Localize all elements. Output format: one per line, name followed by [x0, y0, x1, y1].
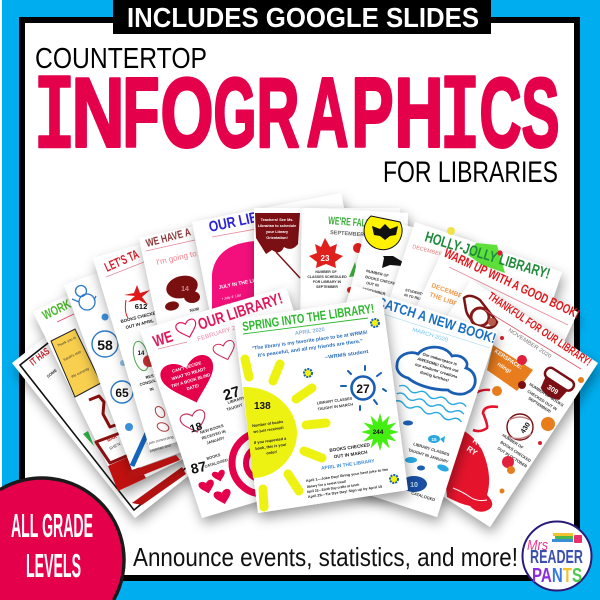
card: let's talk: CONSUL [139, 378, 157, 387]
orange callout: KERSPACE: [493, 349, 523, 371]
card: let's talk: LET'S TA [102, 246, 141, 275]
logo: Mrs Reader Pants: PANTS [532, 565, 582, 587]
card: teachers: Teachers! See Ms. [261, 218, 293, 222]
card: we love our library [140, 287, 346, 518]
card: bat: OUT IN [366, 281, 379, 288]
April event list: library for a sweet treat! [307, 480, 346, 489]
stat: 87 [189, 452, 228, 477]
card: our library July: • July 4: Libr [221, 293, 242, 301]
cloud callout [397, 347, 475, 394]
card: thankful for our library: NOVEMBER 2020 [507, 328, 552, 360]
heading: infographics: C [480, 58, 522, 168]
card: spring into the library [234, 297, 408, 513]
card: catch a new book [292, 285, 498, 517]
badge: all grade levels: LEVELS [26, 547, 81, 584]
card: work: MAR [106, 434, 118, 443]
card: spring into the library: TAUGHT IN MARCH [318, 402, 354, 411]
card: we love our library: WE [151, 328, 175, 351]
card: thankful for our library: RY [465, 444, 479, 458]
waves [394, 384, 467, 424]
card: we have a: WE HAVE A [145, 226, 192, 250]
cloud callout: AWESOME! Check out [417, 356, 460, 373]
card: work: SHE'N [108, 441, 121, 451]
stat: 87: BOOKS [206, 452, 221, 461]
card: let's talk: pajamas and [149, 443, 171, 453]
card: we're falling: SEPTEMBER 2 [330, 230, 369, 239]
card: holly-jolly library: DECEMBER [411, 244, 443, 258]
icon: outline heart [175, 318, 199, 340]
card: teachers: your Library [266, 230, 289, 234]
big heart callout: TRY A BOOK BLIND [171, 372, 211, 389]
big heart callout: WHAT TO READ? [171, 366, 207, 381]
icon: books and mug [552, 533, 582, 543]
icon: apple stat 14: 14 [138, 351, 145, 357]
stat: 27 sun: 27 [356, 382, 370, 396]
flower icons [304, 319, 398, 483]
heading: infographics: I [451, 58, 468, 168]
April event list: April 22—Earth Day crafts at lunch [307, 483, 360, 494]
stat: 18: 18 [189, 421, 204, 436]
card: we're falling: FOR LIBRARY IN [313, 280, 342, 284]
heading: infographics: G [214, 58, 256, 168]
card: catch a new book: TAUGHT IN JANUARY [408, 447, 449, 464]
yellow note box: Sarah's club [63, 350, 82, 362]
card: work [33, 245, 257, 491]
big heart callout: CAN'T DECIDE [171, 360, 202, 374]
card: spring into the library: LIBRARY CLASSES [317, 397, 353, 405]
card: we're falling: CLASSES SCHEDULED [307, 275, 347, 279]
card: bat: SEPTEMBER [362, 287, 386, 296]
card: thankful for our library: SEPTEMBER! [527, 396, 552, 414]
fish [403, 420, 450, 473]
card: our library July: OUR LIB [207, 209, 260, 236]
burst: 244: 244 [373, 429, 384, 436]
card: holly-jolly library [353, 222, 562, 460]
quote: ~WRMS student [324, 349, 369, 361]
icon: red star [124, 285, 150, 305]
orange callout [487, 345, 533, 391]
icon: ball 430 [507, 414, 533, 440]
stat: 18 [179, 409, 209, 436]
card: warm up with a good book [360, 245, 582, 490]
card: catch a new book: LIBRARY CLASSES [413, 441, 450, 457]
cloud callout: Our makerspace is [422, 351, 458, 367]
card: it has (black border): SOME [46, 367, 58, 379]
icon: ball 430: 430 [520, 421, 532, 435]
stat: 58 [92, 331, 118, 357]
card: bat: NUMBER OF [366, 269, 390, 278]
April event list: April 1—Joke Day! Bring your best joke to the [306, 467, 388, 483]
card: our library July: JULY IN THE LI [218, 278, 255, 291]
icon: cornucopia [464, 296, 497, 328]
card: bat [348, 216, 470, 330]
card: thankful for our library: BOOKS CHECKED [499, 440, 532, 463]
card: snowman [64, 233, 275, 470]
card: we love our library: OUR LIBRARY! [196, 290, 285, 334]
quote: "The library is my favorite place to be at WRMS! [251, 330, 368, 352]
card: we love our library: RECEIVED IN [201, 428, 226, 441]
card: bat: BOOKS CHECKED [365, 275, 399, 287]
card: we have a [139, 206, 329, 431]
icon: snowman [72, 286, 96, 310]
card: catch a new book: CATCH A NEW BOOK! [375, 294, 498, 346]
fish: 15 [431, 437, 437, 442]
heading: infographics: A [306, 58, 348, 168]
heading: infographics: R [256, 58, 300, 168]
card: holly-jolly library: STUDENTS [405, 288, 425, 297]
card: we have a: I'm going to a [155, 247, 205, 267]
stat: 87: CATALOGED [204, 457, 228, 469]
heading: infographics: P [352, 58, 394, 168]
heading: infographics: S [522, 58, 560, 168]
card: holly-jolly library: IN TO READ [404, 293, 425, 302]
icon: acorn 309 [535, 366, 576, 405]
card: thankful for our library [363, 280, 598, 527]
orange callout: nting! [496, 362, 512, 375]
card: spring into the library: APRIL IN THE LIBRARY [321, 458, 376, 472]
card: let's talk: - join conversing [146, 435, 174, 446]
card: we love our library: JANUARY [206, 435, 225, 445]
cloud callout: our students' creations [414, 362, 459, 379]
stat: 65: 65 [115, 386, 129, 400]
logo: Mrs Reader Pants: Mrs [527, 537, 548, 554]
icon: apple stat 14 [131, 340, 155, 372]
card: spring into the library: SPRING INTO THE LIBRARY! [241, 301, 375, 334]
logo: Mrs Reader Pants [522, 522, 592, 590]
burst: 244 [361, 413, 399, 451]
sun: If you requested a [254, 436, 287, 445]
card: we love our library: 27 [221, 383, 242, 404]
card: we love our library: FEBRUARY 2020 [197, 322, 247, 343]
card: we love our library: TAUGHT [226, 402, 243, 412]
heading: infographics: N [72, 58, 124, 168]
sun: Number of books [252, 420, 283, 428]
card: our library July [192, 193, 378, 409]
card: we have a: GENRE [183, 315, 199, 323]
card: let's talk [93, 216, 294, 481]
April event list: April 29—Tie Dye Day! Sign up by April 15 [308, 485, 382, 499]
big heart callout [158, 352, 222, 410]
badge: all grade levels [0, 478, 124, 600]
card: spring into the library: OUT IN MARCH [333, 450, 368, 459]
stat: 10 [401, 476, 427, 492]
card: we're falling: 23 [321, 254, 330, 263]
card: let's talk: BOOKS CHECKED [120, 310, 159, 324]
card: we're falling: NUMBER OF [315, 270, 337, 274]
card: it has (black border): IT HAS [28, 346, 52, 368]
quote: It's peaceful, and all my friends are there." [257, 338, 364, 359]
badge: all grade levels: ALL GRADE [11, 507, 93, 544]
card: thankful for our library: R IN [471, 436, 489, 453]
tagline: Announce events, statistics, and more! [133, 542, 518, 572]
card: teachers [254, 208, 400, 400]
card: catch a new book: MARCH 2020 [411, 327, 449, 344]
heading: infographics [39, 58, 560, 168]
yellow note box [51, 329, 101, 397]
sun: we just received! [252, 426, 284, 434]
maroon leaf callout [255, 213, 300, 254]
stat: 27 sun [341, 366, 386, 410]
icon: bat moon [364, 216, 403, 268]
stat: 10: 10 [410, 482, 418, 489]
card: let's talk: OUT IN APRIL [125, 318, 155, 330]
card: warm up with a good book: DECEMBER [430, 282, 468, 302]
April event list [306, 467, 388, 499]
card: it has (black border) [12, 269, 255, 518]
pink shape [212, 241, 270, 320]
yellow note box: We currently [71, 367, 90, 379]
heading: infographics: I [46, 58, 63, 168]
stat: 87: 87 [189, 458, 208, 477]
card: teachers: Orientation! [266, 236, 288, 240]
heading: infographics: O [160, 58, 214, 168]
icon: maple leaf [309, 238, 343, 268]
card: we're falling [300, 208, 408, 330]
filled hearts [198, 469, 233, 506]
target rings [232, 432, 294, 494]
card: thankful for our library: NUMBER OF [501, 433, 525, 450]
heading: infographics: F [122, 58, 160, 168]
red blob [440, 425, 492, 512]
card: we love our library: LIBRARY [227, 395, 245, 405]
stat: 65 [111, 381, 133, 403]
card: spring into the library: APRIL 2020 [295, 327, 325, 337]
card: thankful for our library: NUMBER OF BOOKS [528, 382, 565, 408]
sun: order! [266, 450, 277, 455]
big heart callout: DATE! [186, 383, 200, 391]
card: we're falling: WE'RE FALL [328, 215, 371, 230]
card: we're falling: SEPTEMBER [316, 285, 338, 289]
card: thankful for our library: OUT IN OCTOBER [496, 446, 528, 469]
card: we have a: 14 [181, 286, 189, 293]
card: work: WORK [40, 296, 74, 323]
card: let's talk: IN [149, 386, 154, 392]
quote [251, 330, 369, 361]
card: spring into the library: BOOKS CHECKED [329, 442, 371, 453]
card: holly-jolly library: HOLLY-JOLLY LIBRARY! [423, 229, 552, 283]
sun: book, this is your [255, 443, 287, 451]
stat: 58: 58 [97, 337, 113, 353]
icon: coffee beans [164, 272, 200, 312]
card: we have a: NUM [189, 306, 200, 313]
card: warm up with a good book: THE LIBRA [428, 291, 464, 310]
icon: acorn 309: 309 [546, 384, 559, 396]
card: our library July: • July 12 [221, 301, 236, 308]
card: catch a new book: CATALOGED [411, 490, 436, 502]
top banner: INCLUDES GOOGLE SLIDES [127, 2, 479, 33]
heading: countertop: COUNTERTOP [35, 43, 207, 75]
card: let's talk: RES [145, 373, 155, 380]
sun: 138 [254, 401, 271, 412]
maroon stamp icon [89, 396, 140, 463]
card: let's talk: 612 [135, 302, 147, 311]
yellow note box: Thank you to [57, 335, 77, 348]
heading: infographics: H [394, 58, 444, 168]
card: we love our library: NEW BOOKS [199, 423, 225, 435]
card: teachers: Librarian to schedule [258, 224, 296, 228]
sun [243, 359, 326, 507]
cloud callout: during lunches! [419, 369, 450, 383]
card: thankful for our library: CHECKED OUT IN [526, 389, 558, 412]
